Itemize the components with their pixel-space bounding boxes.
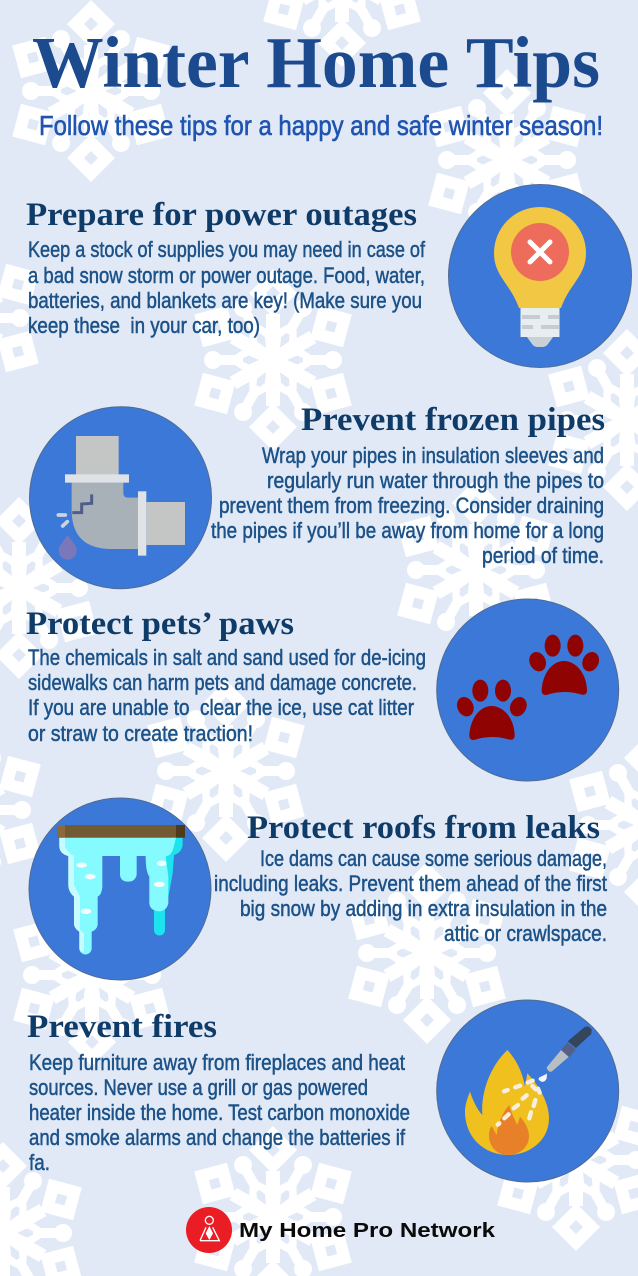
text block: Keep furniture away from fireplaces and heat: [29, 1050, 405, 1075]
text block: keep these in your car, too): [28, 313, 260, 338]
icon: light bulb: [448, 184, 632, 368]
text block: attic or crawlspace.: [444, 921, 607, 946]
text block: [211, 443, 604, 568]
text block: batteries, and blankets are key! (Make sure you: [28, 288, 422, 313]
heading: Protect pets’ paws: [26, 606, 294, 642]
panel: protect pets' paws: [26, 599, 619, 781]
icon: paw prints: [437, 599, 619, 781]
panel: protect roofs from leaks: [29, 798, 607, 980]
panel: prevent fires: [27, 1000, 619, 1182]
text block: heater inside the home. Test carbon monoxide: [29, 1100, 410, 1125]
text block: a bad snow storm or power outage. Food, water,: [28, 263, 425, 288]
heading: Prevent frozen pipes: [301, 402, 605, 438]
text block: [29, 1050, 410, 1175]
text block: Keep a stock of supplies you may need in case of: [28, 237, 426, 262]
panel: prevent frozen pipes: [30, 402, 605, 589]
text block: If you are unable to clear the ice, use cat litter: [28, 695, 414, 720]
icon: icicles: [29, 798, 211, 980]
title: Winter Home Tips: [32, 22, 600, 103]
text block: and smoke alarms and change the batteries if: [29, 1125, 406, 1150]
text block: [214, 846, 607, 946]
text block: fa.: [29, 1150, 50, 1175]
heading: Prepare for power outages: [26, 197, 417, 233]
text block: or straw to create traction!: [28, 721, 253, 746]
logo: My Home Pro Network: [186, 1207, 496, 1253]
text block: [28, 645, 426, 746]
icon: logo badge: [186, 1207, 232, 1253]
icon: fire and extinguisher dropper: [437, 1000, 619, 1182]
text block: sidewalks can harm pets and damage concrete.: [28, 670, 417, 695]
logo text: My Home Pro Network: [239, 1220, 496, 1242]
icon: leaking pipe: [30, 407, 212, 589]
heading: Protect roofs from leaks: [247, 810, 600, 846]
text block: sources. Never use a grill or gas powered: [29, 1075, 368, 1100]
heading: Prevent fires: [27, 1009, 217, 1045]
text block: period of time.: [482, 543, 604, 568]
text block: The chemicals in salt and sand used for de-icing: [28, 645, 426, 670]
text block: [28, 237, 426, 338]
panel: prepare for power outages: [26, 184, 632, 368]
